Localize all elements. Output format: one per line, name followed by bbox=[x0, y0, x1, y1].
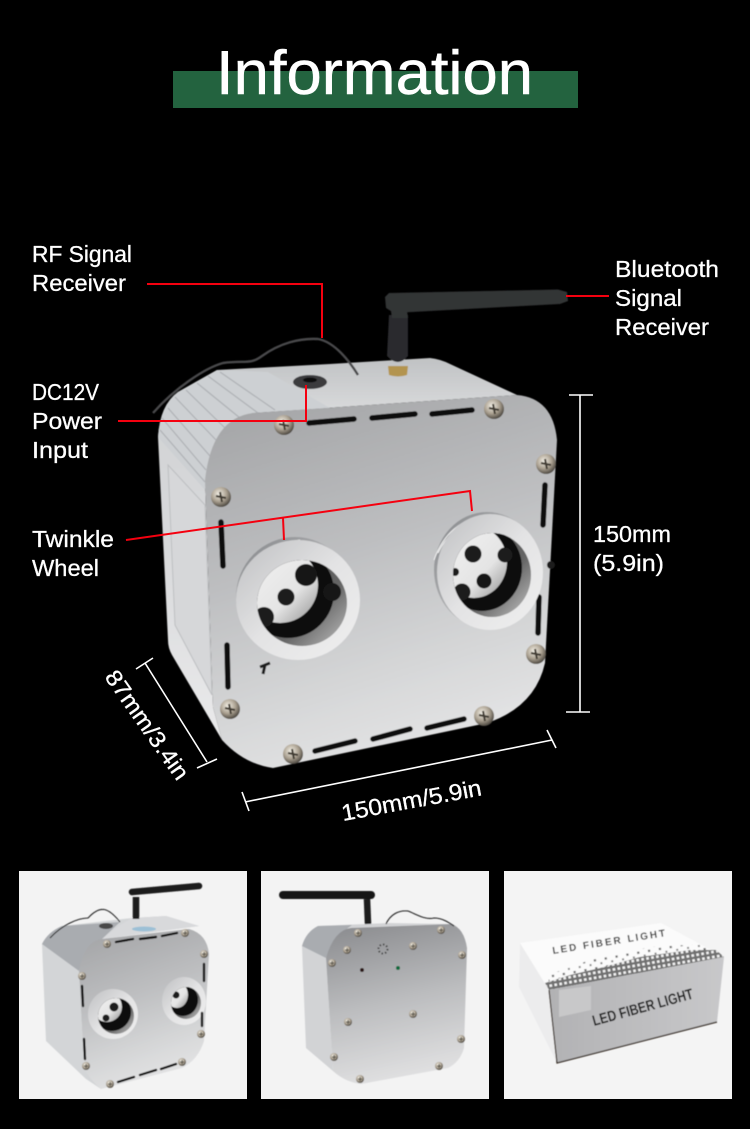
callout: Twinkle Wheel: Wheel bbox=[32, 555, 99, 581]
body top bbox=[214, 358, 517, 430]
callout: RF Signal Receiver: RF Signal bbox=[32, 241, 132, 267]
heading: Information: Information bbox=[216, 39, 533, 108]
dimension: height 150mm (5.9in): 150mm bbox=[593, 521, 671, 547]
screws on front plate bbox=[211, 399, 556, 764]
gold connector bbox=[388, 366, 408, 376]
recessed side panel bbox=[168, 465, 212, 695]
callout: DC12V Power Input bbox=[32, 379, 306, 463]
antenna bbox=[387, 315, 408, 362]
dimension: height 150mm (5.9in) bbox=[566, 395, 671, 712]
ribbed side strip bbox=[158, 370, 330, 490]
photo panel: LED FIBER LIGHT box: LED FIBER LIGHT bbox=[552, 928, 666, 957]
body side bbox=[158, 370, 300, 740]
vent slots bbox=[221, 410, 545, 751]
callout: DC12V Power Input: Power bbox=[32, 408, 102, 434]
photo panel: front view bbox=[19, 871, 247, 1099]
small black screws bbox=[547, 561, 555, 569]
main product photo: LED fiber light engine bbox=[153, 290, 568, 768]
photo panel: back view bbox=[261, 871, 489, 1099]
callout: DC12V Power Input: DC12V bbox=[32, 379, 99, 405]
dimension: width 150mm/5.9in: 150mm/5.9in bbox=[339, 774, 484, 826]
callout: Bluetooth Signal Receiver bbox=[566, 256, 719, 340]
left twinkle ring bbox=[236, 537, 360, 660]
callout: Bluetooth Signal Receiver: Receiver bbox=[615, 314, 709, 340]
front plate bbox=[205, 395, 557, 768]
callout: DC12V Power Input: Input bbox=[32, 437, 88, 463]
callout: RF Signal Receiver bbox=[32, 241, 322, 338]
callout: Bluetooth Signal Receiver: Signal bbox=[615, 285, 682, 311]
photo panel: LED FIBER LIGHT box bbox=[504, 871, 732, 1099]
wire bbox=[153, 339, 358, 413]
dimension: depth 87mm/3.4in: 87mm/3.4in bbox=[100, 665, 195, 785]
callout: RF Signal Receiver: Receiver bbox=[32, 270, 126, 296]
dimension: width 150mm/5.9in bbox=[242, 730, 556, 826]
callout: Bluetooth Signal Receiver: Bluetooth bbox=[615, 256, 719, 282]
callout: Twinkle Wheel bbox=[32, 491, 472, 581]
callout: Twinkle Wheel: Twinkle bbox=[32, 526, 114, 552]
top power socket bbox=[293, 375, 327, 389]
photo panel: LED FIBER LIGHT box: LED FIBER LIGHT bbox=[591, 986, 695, 1030]
right twinkle ring bbox=[434, 512, 543, 630]
dimension: depth 87mm/3.4in bbox=[100, 658, 217, 785]
dimension: height 150mm (5.9in): (5.9in) bbox=[593, 550, 664, 576]
